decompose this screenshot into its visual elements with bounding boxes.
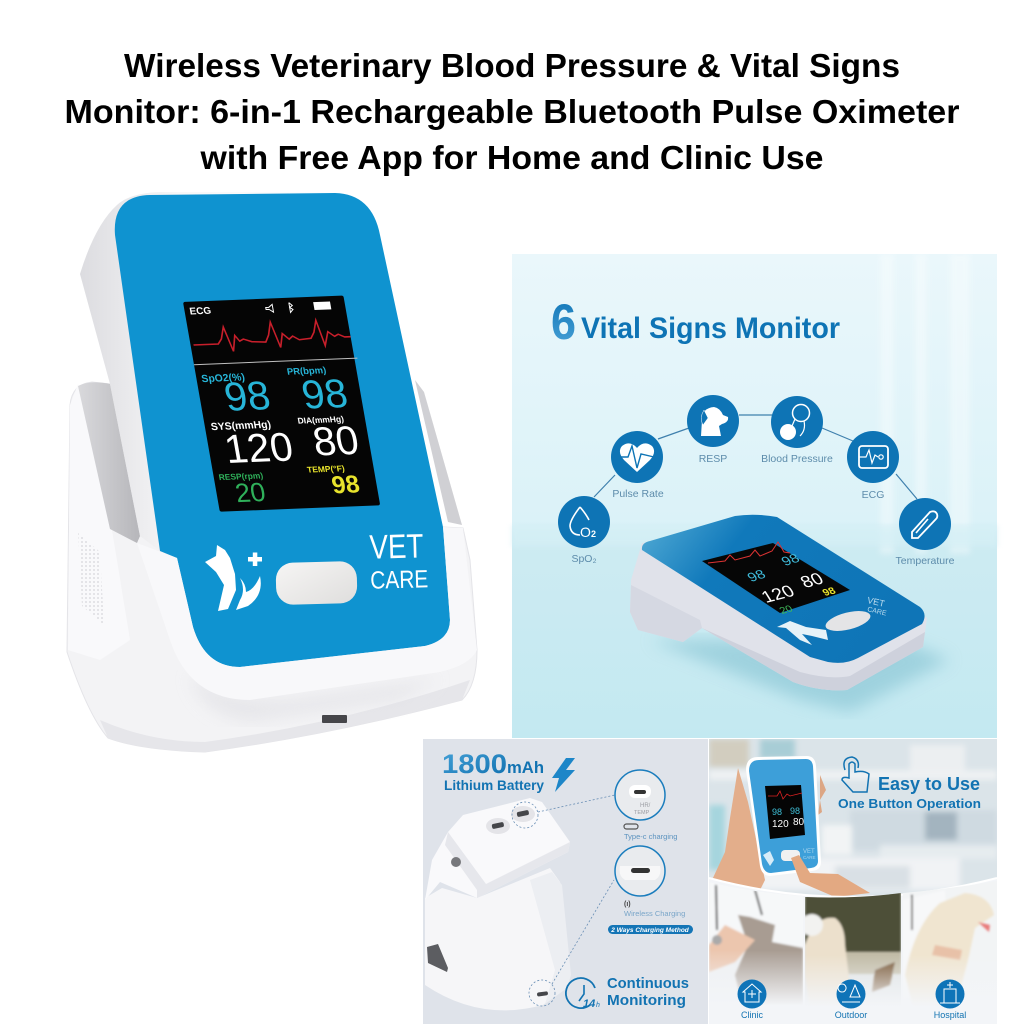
photo: vet with cat bbox=[709, 884, 803, 1001]
systolic reading: SYS(mmHg) bbox=[210, 420, 272, 433]
icon: clock 14h bbox=[566, 978, 600, 1010]
icon: dog and cat logo bbox=[205, 545, 262, 611]
icon: clinic bbox=[738, 980, 766, 1008]
continuous monitoring text: Monitoring bbox=[607, 992, 686, 1009]
photo: vet with golden retriever bbox=[903, 886, 995, 996]
label: hospital: Hospital bbox=[934, 1010, 966, 1020]
icon: clock 14h: h bbox=[596, 1002, 600, 1009]
respiration reading: RESP(rpm) bbox=[218, 470, 264, 482]
icon: outdoor bbox=[836, 980, 866, 1008]
pulse reading: PR(bpm) bbox=[286, 364, 327, 377]
blue monitor lying flat: 80 bbox=[796, 569, 827, 591]
temperature reading: TEMP(°F) bbox=[306, 463, 346, 475]
label: clinic: Clinic bbox=[741, 1010, 763, 1020]
label: temperature: Temperature bbox=[896, 555, 955, 567]
monitor body bbox=[80, 192, 360, 560]
callout: type-c charging: HR/ bbox=[640, 803, 651, 809]
heading: 6 bbox=[551, 294, 576, 350]
small brand: CARE bbox=[867, 606, 887, 618]
temperature reading: 98 bbox=[330, 471, 362, 499]
blue monitor lying flat bbox=[630, 515, 927, 690]
continuous monitoring text: Continuous bbox=[607, 975, 689, 992]
hand holding device bbox=[712, 768, 765, 890]
heading: Vital Signs Monitor bbox=[581, 312, 840, 345]
label: blood pressure: Blood Pressure bbox=[761, 453, 833, 465]
icon: SpO2 bbox=[558, 496, 610, 548]
button bbox=[275, 561, 358, 605]
callout: type-c charging: Type-c charging bbox=[624, 832, 677, 841]
temperature reading bbox=[306, 463, 362, 500]
speaker grille bbox=[78, 533, 104, 625]
continuous monitoring text bbox=[607, 975, 689, 1009]
title: Monitor: 6-in-1 Rechargeable Bluetooth Pulse Oximeter bbox=[64, 93, 960, 130]
blue monitor lying flat: 98 bbox=[745, 567, 769, 585]
label: ECG: ECG bbox=[862, 489, 884, 501]
photo: dogs outdoors bbox=[805, 893, 901, 998]
icon: SpO2: O bbox=[580, 524, 591, 540]
easy to use heading: One Button Operation bbox=[838, 796, 981, 811]
brand text: VET bbox=[369, 527, 424, 567]
respiration reading: 20 bbox=[233, 477, 268, 508]
dashed callouts bbox=[512, 795, 615, 1006]
small brand: VET bbox=[866, 595, 886, 609]
battery heading: mAh bbox=[507, 758, 544, 777]
SpO2 reading: 98 bbox=[221, 372, 274, 420]
respiration reading bbox=[218, 470, 269, 509]
icon: temperature bbox=[899, 498, 951, 550]
ECG label: ECG bbox=[189, 306, 212, 318]
panel: 6 vital signs monitor bbox=[512, 254, 997, 738]
panel: easy to use and settings bbox=[709, 739, 997, 1024]
clinic background photo bbox=[709, 739, 997, 899]
blue monitor lying flat: 120 bbox=[757, 581, 798, 606]
callout: wireless charging: (ı) bbox=[624, 901, 631, 908]
icon: ECG bbox=[847, 431, 899, 483]
cradle front rim bbox=[137, 527, 477, 700]
battery heading bbox=[442, 749, 544, 793]
SpO2 reading: SpO2(%) bbox=[201, 373, 246, 385]
icon: blood pressure bbox=[771, 396, 823, 448]
title bbox=[64, 47, 960, 176]
handheld monitor: VET bbox=[803, 849, 815, 855]
USB port bbox=[322, 715, 347, 723]
battery heading: Lithium Battery bbox=[444, 777, 544, 793]
pulse reading: 98 bbox=[298, 370, 351, 418]
callout: type-c charging: TEMP bbox=[634, 810, 650, 816]
small screen bbox=[702, 543, 850, 613]
heading bbox=[551, 294, 840, 350]
blue monitor lying flat: 98 bbox=[820, 585, 838, 598]
brand text bbox=[369, 527, 429, 595]
connector arc bbox=[594, 415, 917, 499]
cradle slot bbox=[78, 382, 140, 543]
handheld monitor: 80 bbox=[793, 817, 805, 828]
small brand bbox=[865, 595, 890, 618]
icon: lightning bolt bbox=[552, 758, 575, 792]
handheld monitor: 120 bbox=[772, 819, 789, 830]
curved divider bbox=[709, 878, 997, 1024]
device shadow bbox=[650, 640, 950, 712]
icon: tap hand bbox=[842, 757, 869, 792]
blue monitor lying flat: 98 bbox=[779, 551, 803, 569]
label: pulse rate: Pulse Rate bbox=[612, 488, 664, 500]
easy to use heading: Easy to Use bbox=[878, 774, 980, 794]
systolic reading: 120 bbox=[221, 424, 296, 472]
icon: RESP dog bbox=[687, 395, 739, 447]
icon: clock 14h: 14 bbox=[583, 998, 595, 1010]
small logo bbox=[777, 621, 828, 645]
head bbox=[425, 798, 570, 900]
panel: main monitor product photo bbox=[67, 192, 477, 752]
label: outdoor: Outdoor bbox=[835, 1010, 867, 1020]
panel: battery and charging bbox=[423, 739, 708, 1024]
stand bbox=[425, 868, 570, 1010]
icon: hospital bbox=[936, 980, 964, 1008]
diastolic reading: DIA(mmHg) bbox=[297, 414, 345, 426]
icon: SpO2: 2 bbox=[591, 529, 596, 539]
icon: pulse rate bbox=[611, 431, 663, 483]
handheld monitor bbox=[746, 756, 821, 876]
device screen bbox=[183, 295, 383, 512]
battery heading: 1800 bbox=[442, 749, 507, 779]
callout: wireless charging: Wireless Charging bbox=[624, 909, 685, 918]
finger pressing button bbox=[791, 855, 870, 897]
handheld monitor: CARE bbox=[803, 855, 816, 860]
small button bbox=[824, 607, 872, 635]
label: RESP: RESP bbox=[699, 453, 727, 465]
label: SpO2: SpO₂ bbox=[571, 553, 597, 565]
easy to use heading bbox=[838, 774, 981, 811]
status icons bbox=[265, 301, 331, 313]
brand text: CARE bbox=[370, 565, 429, 595]
blue monitor lying flat: 20 bbox=[777, 603, 795, 616]
callout: type-c charging bbox=[615, 770, 677, 841]
badge: 2 ways charging method: 2 Ways Charging Method bbox=[610, 927, 690, 934]
title: with Free App for Home and Clinic Use bbox=[199, 139, 823, 176]
handheld monitor: 98 bbox=[790, 806, 800, 816]
ECG waveform bbox=[190, 319, 352, 353]
diastolic reading: 80 bbox=[309, 417, 362, 464]
callout: wireless charging bbox=[615, 846, 685, 918]
handheld monitor: 98 bbox=[772, 807, 782, 817]
title: Wireless Veterinary Blood Pressure & Vital Signs bbox=[124, 47, 900, 84]
white device rear view bbox=[425, 798, 571, 1010]
cradle base bbox=[67, 382, 477, 752]
blue faceplate bbox=[115, 193, 450, 667]
